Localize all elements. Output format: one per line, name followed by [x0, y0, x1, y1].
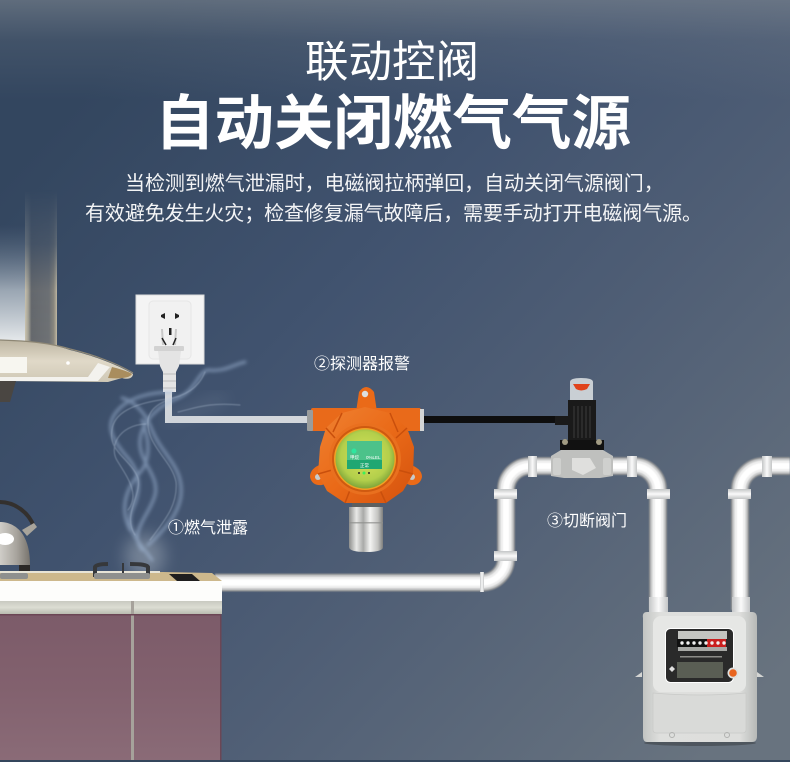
cabinet doors: [0, 614, 131, 760]
detector LCD screen: 0%LEL: [366, 455, 381, 460]
white countertop: [0, 581, 222, 601]
description text: [85, 172, 702, 225]
detector LCD screen: 甲烷: [350, 454, 359, 461]
icon: solenoid valve: [551, 378, 613, 478]
title: 联动控阀: 联动控阀: [305, 39, 479, 87]
meter feet: [670, 732, 674, 738]
icon: range hood: [0, 190, 133, 402]
valve body: [551, 450, 613, 478]
plug: [154, 346, 184, 392]
detector cable glands: [307, 410, 313, 431]
meter shadow: [644, 740, 756, 746]
icon: gas detector: [307, 387, 424, 552]
meter ears: [635, 672, 764, 677]
detector indicator lights: [358, 472, 370, 474]
meter orange button: [728, 668, 738, 678]
detector mounting tabs: [310, 387, 422, 485]
detector LCD screen: 正常: [360, 462, 369, 469]
stove top: [0, 572, 222, 584]
detector sensor: [349, 500, 383, 552]
title: 自动关闭燃气气源: 自动关闭燃气气源: [155, 90, 631, 157]
icon: power cable: [168, 340, 307, 420]
description text: 有效避免发生火灾；检查修复漏气故障后，需要手动打开电磁阀气源。: [85, 202, 702, 225]
icon: kettle: [0, 502, 37, 577]
label: 燃气泄露: ①燃气泄露: [168, 519, 248, 537]
label: 探测器报警: ②探测器报警: [314, 355, 410, 373]
valve actuator: [555, 400, 604, 450]
icon: gas meter: [635, 597, 764, 746]
meter body: [643, 612, 757, 742]
icon: gas leak smoke: [111, 362, 245, 578]
icon: wall socket with plug: [136, 295, 204, 392]
pipes: [215, 456, 790, 610]
valve indicator cap: [570, 378, 593, 400]
gas burners: [0, 563, 150, 579]
pipe collars: [480, 456, 772, 592]
label: 切断阀门: ③切断阀门: [547, 512, 627, 530]
detector housing: [318, 407, 414, 503]
cabinet trim: [0, 601, 222, 614]
description text: 当检测到燃气泄漏时，电磁阀拉柄弹回，自动关闭气源阀门，: [125, 172, 664, 195]
meter display window: [666, 628, 734, 682]
kitchen counter and cabinet: [0, 563, 222, 760]
meter connectors: [649, 597, 668, 613]
black signal cable: [423, 416, 556, 423]
detector LCD screen: [347, 441, 382, 469]
icon: hood bracket: [0, 381, 16, 402]
